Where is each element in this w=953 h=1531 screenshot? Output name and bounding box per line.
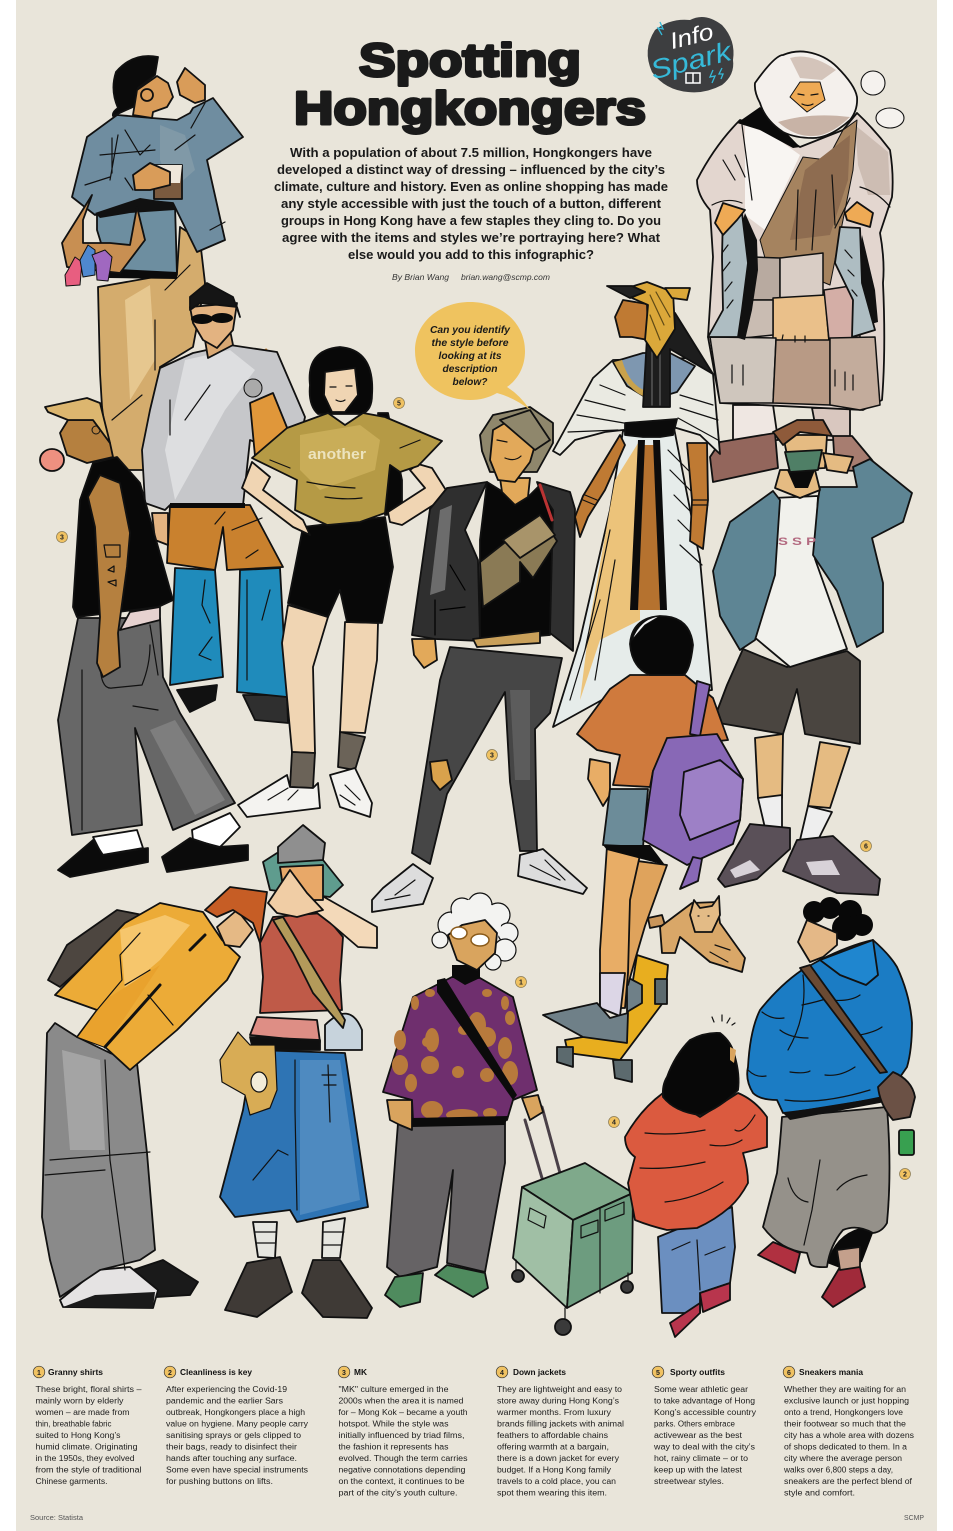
- intro text: any style accessible with just the touch of a button, different: [281, 196, 662, 211]
- arm: [313, 893, 377, 948]
- callout: speech bubble: looking at its: [438, 351, 502, 362]
- mask: [785, 450, 822, 472]
- intro text: agree with the items and styles we’re portraying here? What: [282, 230, 661, 245]
- mustard tee: [252, 413, 442, 525]
- hem: [412, 1116, 508, 1127]
- title: [294, 34, 646, 134]
- credit: SCMP: [904, 1515, 924, 1522]
- logo: Info Spark badge: Spark: [647, 36, 736, 85]
- description: 3 MK: [338, 1366, 468, 1498]
- back foot: [627, 977, 642, 1012]
- description: 1 granny shirts: in the 1950s, they evolved: [36, 1454, 134, 1463]
- bike shorts: [288, 517, 393, 623]
- callout: speech bubble: [415, 302, 530, 410]
- ankle shadow: [827, 1228, 873, 1268]
- headphones at hip: [325, 1014, 362, 1050]
- face and neck: [133, 76, 173, 118]
- orange hood: [205, 887, 267, 943]
- description: 4 down jackets: 4: [500, 1370, 504, 1377]
- cap: [773, 420, 832, 445]
- intro text: groups in Hong Kong have a few staples they cling to. Do you: [281, 213, 661, 228]
- right fish: [855, 235, 878, 325]
- description: 4 down jackets: Down jackets: [513, 1368, 567, 1377]
- sandals: [58, 840, 148, 877]
- description: 2 cleanliness is key: Cleanliness is key: [180, 1368, 253, 1377]
- pleated cape: [553, 358, 720, 455]
- coat: [697, 113, 893, 410]
- figure: sporty girl in mustard tee and bike shorts: [238, 347, 449, 817]
- tank top: [73, 457, 173, 617]
- brown apron: [760, 120, 857, 285]
- description: 4 down jackets: travels to a cold place, you can: [497, 1477, 616, 1486]
- description: 3 MK: on the context, it continues to be: [338, 1477, 465, 1486]
- description: 5 sporty outfits: streetwear styles.: [654, 1477, 724, 1486]
- face: [217, 910, 253, 947]
- description: 2 cleanliness is key: Some even have special instruments: [166, 1466, 308, 1474]
- sock: [837, 1247, 860, 1270]
- socks: [253, 1222, 277, 1258]
- intro text: climate, culture and history. Even as online shopping has made: [274, 179, 668, 194]
- description: 2 cleanliness is key: [164, 1366, 308, 1486]
- intro text: else would you add to this infographic?: [348, 247, 594, 262]
- description: 3 MK: hotspot. While the style was: [338, 1420, 448, 1428]
- sweater: [142, 345, 305, 510]
- description: 4 down jackets: feathers to affordable chains: [497, 1431, 608, 1440]
- shoes: [372, 864, 433, 912]
- source: Source: Statista: [30, 1515, 83, 1522]
- description: 1 granny shirts: Chinese garments.: [36, 1477, 108, 1486]
- collar: [613, 353, 695, 400]
- description: 2 cleanliness is key: value on hygiene. Many people carry: [166, 1420, 308, 1428]
- floral print: [392, 989, 518, 1121]
- tote bag straps: [257, 350, 280, 395]
- face: [615, 300, 648, 340]
- figure: girl in red puffer jacket: [625, 1015, 767, 1337]
- slicked hair: [190, 283, 240, 317]
- cart left side: [513, 1187, 573, 1308]
- crossbody strap: [437, 978, 517, 1100]
- cart handle: [525, 1107, 560, 1178]
- description: 6 sneakers mania: their footwear so much that the: [784, 1420, 907, 1428]
- blue denim shorts: [220, 1050, 368, 1222]
- cart top: [522, 1163, 633, 1220]
- socks: [290, 752, 315, 788]
- description: 1 granny shirts: [33, 1366, 142, 1486]
- description: 5 sporty outfits: Kong’s accessible country: [654, 1408, 756, 1417]
- face: [490, 423, 535, 482]
- description: 2 cleanliness is key: for pushing buttons on lifts.: [166, 1477, 273, 1486]
- face: [798, 920, 837, 962]
- socks: [93, 830, 143, 855]
- description: 1 granny shirts: humid climate. Originating: [36, 1442, 138, 1452]
- description: 4 down jackets: warmer months. From luxury: [496, 1408, 611, 1417]
- hair: [310, 347, 372, 414]
- centre panel: [634, 445, 660, 610]
- number markers on figures: 1: [519, 980, 523, 986]
- front leg: [600, 846, 640, 1008]
- description: 4 down jackets: brands filling jackets with animal: [497, 1420, 624, 1428]
- legs: [755, 734, 783, 798]
- orange tee: [577, 675, 728, 787]
- sneakers: [718, 824, 790, 887]
- description: 2 cleanliness is key: outbreak, Hongkongers place a high: [166, 1408, 305, 1417]
- strap: [800, 965, 887, 1073]
- description: 3 MK: "MK" culture emerged in the: [338, 1385, 449, 1394]
- black shadow under hood: [737, 107, 800, 148]
- description: 2 cleanliness is key: 2: [168, 1370, 172, 1377]
- face and neck: [324, 368, 358, 412]
- description: 5 sporty outfits: Some wear athletic gear: [654, 1385, 748, 1394]
- yellow jacket: [55, 903, 240, 1070]
- baggy grey jeans: [58, 618, 235, 835]
- red shoes: [758, 1242, 800, 1273]
- description: 5 sporty outfits: keep up with the latest: [654, 1466, 743, 1474]
- icon: tabby cat: [648, 896, 745, 972]
- face: [790, 82, 825, 112]
- socks: [758, 795, 782, 828]
- intro text: developed a distinct way of dressing – influenced by the city’s: [277, 162, 665, 177]
- jacket: [713, 491, 780, 650]
- backpack: [378, 413, 402, 515]
- description: 6 sneakers mania: of shops dedicated to them. In a: [784, 1442, 908, 1452]
- cap: [278, 825, 325, 863]
- callout: speech bubble: the style before: [432, 338, 509, 349]
- raised hand: [177, 68, 205, 103]
- backpack: [690, 681, 710, 736]
- hair: [630, 616, 693, 675]
- waistband: [120, 607, 160, 630]
- hands: [387, 1100, 412, 1130]
- bag strap: [273, 917, 345, 1028]
- left fish: [735, 213, 758, 340]
- description: 3 MK: part of the city’s youth culture.: [338, 1488, 458, 1498]
- cart right side: [567, 1193, 633, 1308]
- shorts: [603, 789, 648, 847]
- number markers on figures: 5: [397, 400, 401, 408]
- logo: Info Spark badge: [647, 17, 736, 92]
- gold headdress: [627, 282, 675, 358]
- belt: [250, 1037, 320, 1050]
- description: 2 cleanliness is key: sanitising sprays or gels clipped to: [166, 1431, 302, 1440]
- title: Hongkongers: [294, 82, 646, 134]
- intro text: With a population of about 7.5 million, Hongkongers have: [290, 145, 652, 160]
- figure: girl with cap, teal hair and wide denim shorts: [220, 825, 377, 1318]
- face: [280, 865, 323, 900]
- figure: boy bowing in yellow jacket: [42, 887, 267, 1308]
- surprise marks: [712, 1015, 735, 1025]
- grey cargo trousers: [42, 1023, 155, 1297]
- neck: [205, 330, 233, 358]
- description: 5 sporty outfits: activewear as the best: [654, 1431, 743, 1440]
- glasses: [451, 927, 489, 946]
- description: 6 sneakers mania: city where the average person: [784, 1454, 902, 1463]
- crescent bag: [62, 195, 145, 273]
- number markers on figures: 4: [612, 1120, 616, 1126]
- title: Spotting: [359, 34, 581, 86]
- figure: MK boy with bubble gum and baggy jeans: [40, 398, 248, 877]
- keys: [322, 1065, 336, 1122]
- legs: [282, 605, 328, 753]
- face: [448, 920, 497, 970]
- red puffer: [625, 1093, 767, 1230]
- description: 6 sneakers mania: sneakers are the perfect blend of: [784, 1477, 913, 1486]
- description: 1 granny shirts: from the style of traditional: [36, 1466, 142, 1474]
- white curly hair: [432, 893, 518, 970]
- description: 5 sporty outfits: 5: [656, 1370, 660, 1377]
- description: 3 MK: 2000s when the area it is named: [338, 1396, 464, 1406]
- description: 4 down jackets: [496, 1366, 624, 1498]
- callout: speech bubble: Can you identify: [430, 325, 510, 336]
- description: 6 sneakers mania: 6: [787, 1370, 791, 1377]
- description: 3 MK: initially influenced by triad films,: [338, 1431, 464, 1440]
- figure: MK person in leather jacket, belt bag and ripped jeans: [372, 407, 587, 912]
- description: 6 sneakers mania: [783, 1366, 914, 1498]
- description: 6 sneakers mania: Sneakers mania: [799, 1368, 864, 1377]
- jacket left panel: [412, 482, 487, 641]
- black tee: [480, 482, 553, 641]
- description: 3 MK: MK: [354, 1368, 367, 1377]
- red tee: [260, 913, 343, 1013]
- arm with tattoo: [88, 475, 130, 677]
- curly hair: [803, 897, 873, 941]
- description: 5 sporty outfits: to take advantage of Hong: [654, 1396, 755, 1406]
- hand: [823, 453, 853, 473]
- red shoes: [670, 1303, 700, 1337]
- jacket right panel: [537, 482, 575, 651]
- description: 2 cleanliness is key: hands after touching any surface.: [166, 1454, 297, 1463]
- hood: [820, 940, 878, 985]
- blond hair: [45, 398, 110, 443]
- hand: [152, 513, 168, 545]
- byline: brian.wang@scmp.com: [461, 272, 550, 282]
- arm: [588, 759, 610, 806]
- teal hair: [263, 853, 343, 897]
- description: 5 sporty outfits: Sporty outfits: [670, 1368, 726, 1377]
- cart wheels: [512, 1260, 633, 1335]
- number markers on figures: 2: [903, 1172, 907, 1178]
- description: 4 down jackets: offering warmth at a bargain,: [497, 1442, 609, 1452]
- ripped jeans: [412, 647, 562, 864]
- sneakers: [238, 775, 320, 817]
- fur hood: [755, 51, 857, 138]
- description: 6 sneakers mania: exclusive launch or just hopping: [784, 1396, 909, 1406]
- shoes: [177, 685, 217, 712]
- black hair: [663, 1033, 739, 1115]
- hair: [113, 56, 158, 116]
- description: 3 MK: 3: [342, 1370, 346, 1377]
- belt: [473, 631, 540, 647]
- sneakers: [133, 1260, 198, 1297]
- description: 1 granny shirts: thin, breathable fabric: [36, 1420, 112, 1428]
- description: 4 down jackets: store away during Hong Kong’s: [497, 1396, 619, 1406]
- figure: man with sunglasses, grey sweater and blue trousers: [142, 283, 305, 723]
- neck: [452, 965, 480, 985]
- sanitiser bottle: [899, 1130, 914, 1155]
- arms: [242, 462, 310, 535]
- grey trousers: [763, 1107, 890, 1267]
- sleeve lines: [712, 125, 890, 250]
- byline: By Brian Wang: [392, 272, 449, 282]
- neck: [775, 470, 820, 498]
- description: 5 sporty outfits: way to deal with the city’s: [653, 1442, 755, 1452]
- figure: granny with floral shirt and shopping cart: [383, 893, 633, 1335]
- sunglasses: [191, 313, 233, 324]
- figure: Egyptian queen: [553, 282, 720, 727]
- black belt: [625, 419, 677, 437]
- plaid skirt layer: [250, 1017, 320, 1042]
- breath puffs: [861, 71, 904, 128]
- description: 6 sneakers mania: onto a trend, Hongkongers love: [784, 1408, 904, 1417]
- belt bag: [480, 515, 557, 607]
- dark shorts: [713, 649, 860, 744]
- number markers on figures: 3: [490, 752, 494, 760]
- description: 6 sneakers mania: style and comfort.: [784, 1488, 855, 1498]
- face: [783, 435, 827, 470]
- blue puffer: [747, 940, 912, 1113]
- description: 3 MK: negative connotations depending: [338, 1466, 466, 1474]
- fringe: [500, 410, 550, 450]
- description: 2 cleanliness is key: After experiencing the Covid-19: [166, 1385, 288, 1394]
- jacket: [72, 98, 243, 252]
- orange shorts: [167, 505, 283, 570]
- hands: [268, 870, 323, 917]
- description: 2 cleanliness is key: pandemic and the earlier Sars: [166, 1396, 283, 1406]
- description: 1 granny shirts: Granny shirts: [48, 1368, 104, 1377]
- backpack: [48, 910, 153, 987]
- yellow stool: [565, 955, 668, 1060]
- description: 1 granny shirts: These bright, floral shirts –: [36, 1385, 142, 1394]
- description: 4 down jackets: spot them wearing this item.: [497, 1488, 607, 1498]
- another wordmark: another: [308, 446, 366, 463]
- description: 5 sporty outfits: hot, rainy climate – or to: [654, 1454, 749, 1463]
- jeans: [658, 1207, 735, 1313]
- sock: [600, 973, 625, 1016]
- SSP print: S S P: [778, 536, 816, 548]
- description: 6 sneakers mania: city has a whole area with dozens: [784, 1431, 914, 1440]
- description: 1 granny shirts: women – are made from: [34, 1408, 130, 1417]
- number markers on figures: 6: [864, 844, 868, 850]
- shoe: [543, 1003, 628, 1043]
- description: 3 MK: for – Mong Kok – became a youth: [338, 1408, 468, 1417]
- description: 1 granny shirts: suited to Hong Kong’s: [36, 1431, 121, 1440]
- description: 4 down jackets: They are lightweight and easy to: [497, 1385, 623, 1394]
- shoulder bag: [878, 1072, 915, 1120]
- blue trousers: [170, 568, 223, 685]
- figure: man in blue puffer with crossbody bag: [747, 897, 915, 1307]
- boots: [225, 1257, 292, 1317]
- gown skirt: [553, 423, 712, 727]
- neck: [500, 478, 530, 505]
- callout: speech bubble: description: [442, 364, 498, 375]
- hands: [715, 203, 745, 235]
- cup and hand: [154, 165, 182, 199]
- description: 3 MK: evolved. Though the term carries: [338, 1454, 468, 1463]
- undershirt: [97, 205, 177, 275]
- boots and ground hide: [710, 405, 880, 482]
- figure: girl with purple backpack on stool: [543, 616, 743, 1082]
- patchwork hem: [710, 253, 880, 410]
- keychain toys: [65, 245, 112, 286]
- face: [190, 303, 237, 348]
- description: 2 cleanliness is key: their bags, ready to disinfect their: [166, 1442, 297, 1452]
- head: [60, 420, 113, 463]
- plush keychain: [220, 1032, 277, 1115]
- description: 5 sporty outfits: [652, 1366, 756, 1486]
- description: 6 sneakers mania: Whether they are waiting for an: [784, 1385, 906, 1394]
- white tee: [753, 496, 847, 667]
- number markers on figures: [56, 398, 910, 1180]
- hair back: [480, 407, 553, 472]
- gum bubble: [40, 449, 64, 471]
- hand: [412, 639, 437, 668]
- figure: fur-coat hunter with fish: [697, 51, 904, 482]
- logo: Info Spark badge: Info: [667, 18, 716, 54]
- intro text: [274, 145, 668, 262]
- description: 6 sneakers mania: walks over 6,800 steps a day,: [783, 1466, 893, 1474]
- arms: [575, 435, 625, 537]
- number markers on figures: 3: [60, 534, 64, 542]
- description: 4 down jackets: budget. If a Hong Kong family: [497, 1466, 611, 1474]
- callout: speech bubble: below?: [452, 377, 488, 388]
- byline: [392, 272, 550, 282]
- trousers: [387, 1123, 505, 1277]
- khaki trousers: [98, 227, 205, 470]
- figure: man in teal jacket and face mask: [713, 420, 912, 895]
- shoes: [385, 1273, 423, 1307]
- description: 1 granny shirts: mainly worn by elderly: [36, 1396, 124, 1406]
- figure: woman in denim jacket with coffee: [62, 56, 243, 470]
- black wig: [643, 313, 713, 407]
- description: 1 granny shirts: 1: [37, 1370, 41, 1377]
- purple shirt: [383, 977, 537, 1120]
- description: 5 sporty outfits: parks. Others embrace: [654, 1420, 736, 1428]
- back leg: [622, 860, 667, 985]
- description: 3 MK: the fashion it represents has: [338, 1442, 448, 1452]
- description: 4 down jackets: there is a down jacket for every: [497, 1454, 619, 1463]
